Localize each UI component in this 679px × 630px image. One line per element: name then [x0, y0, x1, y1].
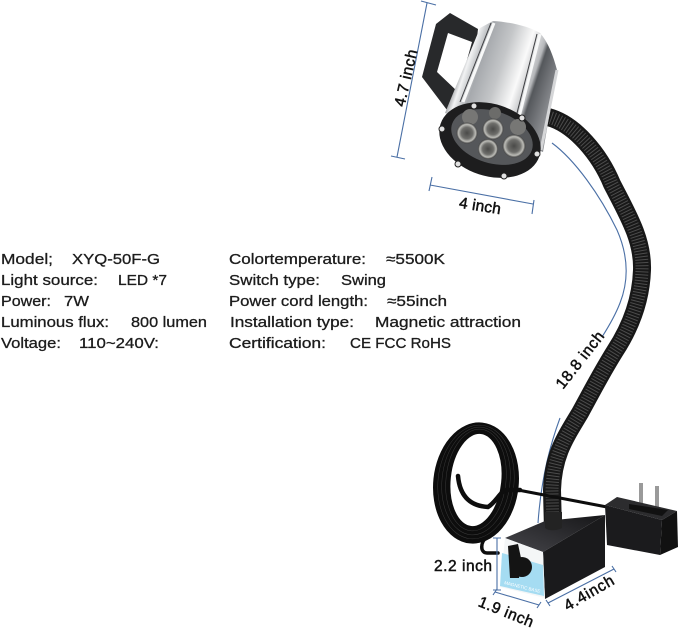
- spec: model: [1, 251, 160, 268]
- spec: luminous flux: 800 lumen: [131, 314, 207, 331]
- lamp face ring: [429, 90, 551, 190]
- spec: installation type: Magnetic attraction: [375, 314, 521, 331]
- dimension label: 18.8 inch: 18.8 inch: [553, 328, 608, 392]
- base top: [505, 515, 605, 552]
- spec: power: 7W: [64, 293, 90, 310]
- dimension label: 4.4 inch: 4.4inch: [561, 572, 617, 615]
- base label: MAGNETIC BASE: [504, 580, 541, 594]
- adapter top: [605, 497, 677, 520]
- adapter prongs: [639, 483, 659, 509]
- base side: [543, 515, 605, 599]
- spec: certification: [229, 335, 451, 352]
- spec: light source: [1, 272, 167, 289]
- dimension line: 1.9 inch: [493, 589, 541, 608]
- hose collar: [545, 512, 562, 530]
- spec: model: Model;: [1, 251, 53, 268]
- power cord coil: [430, 421, 522, 553]
- adapter front: [605, 505, 662, 555]
- spec: power: [1, 293, 90, 310]
- spec: color temperature: [229, 251, 445, 268]
- spec: certification: Certification:: [229, 335, 326, 352]
- body ribs: [463, 23, 557, 150]
- gooseneck hose: [548, 117, 642, 530]
- spec: light source: Light source:: [1, 272, 98, 289]
- rotary switch knob: [508, 544, 532, 578]
- spec: power: Power:: [1, 293, 51, 310]
- spec: luminous flux: [1, 314, 207, 331]
- cord to adapter: [518, 490, 607, 507]
- spec: voltage: 110~240V:: [79, 335, 159, 352]
- spec: switch type: [229, 272, 386, 289]
- spec: color temperature: ≈5500K: [386, 251, 445, 268]
- lamp head: [422, 13, 557, 190]
- base front panel: [500, 538, 545, 598]
- dimension line: 18.8 inch: [538, 143, 626, 523]
- spec: model: XYQ-50F-G: [72, 251, 160, 268]
- power adapter: [605, 483, 678, 555]
- dimension label: 2.2 inch: 2.2 inch: [434, 558, 492, 575]
- specification list: [1, 251, 521, 352]
- spec: power cord length: ≈55inch: [387, 293, 447, 310]
- spec: voltage: Voltage:: [1, 335, 61, 352]
- spec: installation type: Installation type:: [230, 314, 354, 331]
- dimension line: 4 inch: [429, 177, 534, 214]
- spec: switch type: Switch type:: [229, 272, 320, 289]
- spec: luminous flux: Luminous flux:: [1, 314, 109, 331]
- dimension label: 4.7 inch: 4.7 inch: [392, 48, 421, 108]
- dimension line: 4.7 inch: [391, 1, 436, 159]
- dimension label: 4 inch: 4 inch: [458, 195, 502, 218]
- spec: power cord length: [229, 293, 447, 310]
- dimension line: 4.4 inch: [546, 566, 616, 606]
- lamp cylinder body: [445, 21, 557, 152]
- dimension line: 2.2 inch: [493, 538, 501, 590]
- spec: switch type: Swing: [341, 272, 386, 289]
- face screws: [439, 103, 540, 179]
- spec: certification: CE FCC RoHS: [350, 335, 451, 352]
- spec: power cord length: Power cord length:: [229, 293, 368, 310]
- spec: color temperature: Colortemperature:: [229, 251, 366, 268]
- spec: light source: LED *7: [118, 272, 167, 289]
- adapter side: [660, 511, 678, 555]
- spec: installation type: [230, 314, 521, 331]
- spec: voltage: [1, 335, 159, 352]
- LED lenses: [456, 107, 526, 159]
- magnetic base: [500, 515, 605, 599]
- icon: lamp handle: [422, 13, 478, 114]
